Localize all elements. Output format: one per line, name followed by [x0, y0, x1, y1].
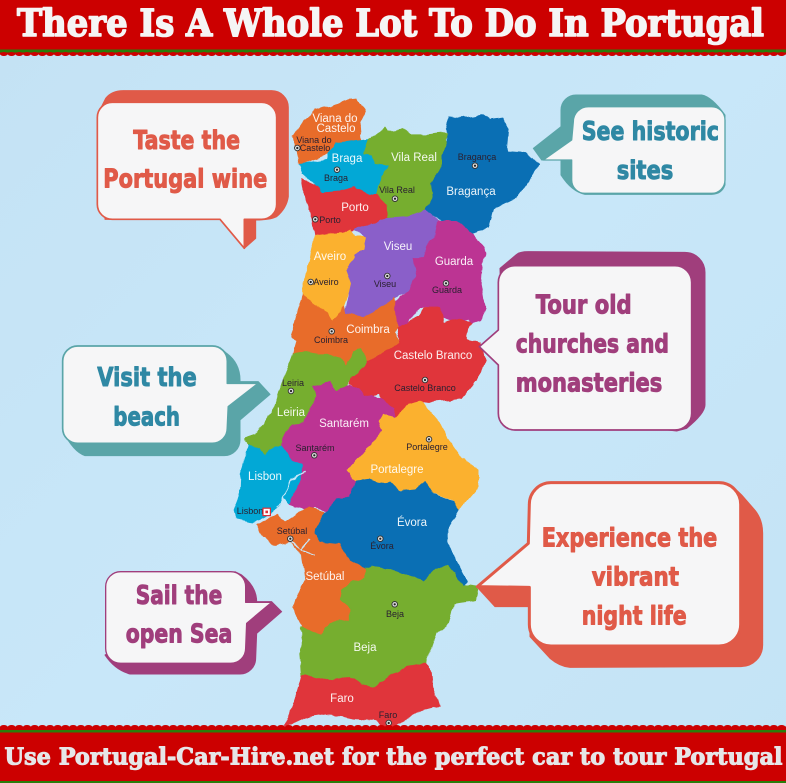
region labels: Coimbra — [314, 335, 348, 345]
region: Castelo Branco — [350, 308, 485, 418]
region: Vila Real — [364, 127, 448, 218]
footer banner — [0, 725, 786, 783]
callout: Experience the vibrant night life: vibrant — [592, 563, 679, 593]
callout: Experience the vibrant night life: Experience the — [542, 524, 717, 554]
region labels: Lisbon — [248, 471, 282, 483]
region labels: Castelo — [300, 143, 330, 153]
region labels: Guarda — [435, 256, 474, 268]
region: Viana do Castelo — [293, 99, 365, 164]
Sado estuary — [290, 538, 315, 555]
region labels: Vila Real — [391, 152, 437, 164]
region labels: Santarém — [319, 418, 369, 430]
region labels: Aveiro — [314, 251, 346, 263]
region labels: Castelo Branco — [394, 350, 472, 362]
region labels: Viseu — [384, 241, 412, 253]
callout: Tour old churches and monasteries — [479, 252, 705, 431]
region: Faro — [285, 663, 438, 730]
callout: Taste the Portugal wine — [97, 91, 288, 248]
Tagus estuary — [277, 472, 306, 507]
region labels: Porto — [319, 215, 341, 225]
region labels: Guarda — [432, 285, 462, 295]
header banner — [0, 0, 786, 56]
callout: Experience the vibrant night life: night life — [582, 601, 687, 631]
region labels: Aveiro — [313, 277, 339, 287]
city marker centres — [289, 147, 476, 724]
region labels: Braga — [324, 173, 348, 183]
region labels: Bragança — [446, 186, 496, 198]
region labels: Braga — [332, 153, 363, 165]
region labels: Faro — [330, 693, 354, 705]
callout: Sail the open Sea — [105, 572, 282, 674]
region labels: Leiria — [282, 378, 304, 388]
region labels: Santarém — [295, 443, 335, 453]
region: Santarém — [282, 382, 395, 512]
region labels: Castelo — [316, 123, 356, 135]
region labels: Portalegre — [370, 464, 424, 476]
region labels: Viana do — [296, 135, 332, 145]
region: Lisbon — [234, 446, 302, 522]
region labels: Beja — [386, 609, 404, 619]
callout: See historic sites — [533, 95, 725, 194]
callout: Sail the open Sea: Sail the — [136, 581, 222, 611]
region labels: Viana do — [312, 113, 358, 125]
region labels: Portalegre — [406, 442, 448, 452]
region labels: Coimbra — [346, 324, 390, 336]
callout: See historic sites: See historic — [582, 117, 719, 147]
callout: Tour old churches and monasteries: churches and — [516, 329, 669, 359]
region labels: Setúbal — [277, 526, 307, 536]
capital marker: Lisbon — [263, 508, 270, 516]
region labels: Leiria — [277, 407, 306, 419]
region: Aveiro — [303, 230, 367, 322]
region: Braga — [300, 139, 390, 196]
callout: Visit the beach: beach — [113, 403, 180, 433]
region labels: Lisbon — [237, 506, 263, 516]
region: Guarda — [393, 222, 486, 327]
region labels: Viseu — [374, 279, 396, 289]
city markers — [288, 145, 478, 726]
region labels — [237, 113, 496, 720]
callout: Experience the vibrant night life — [477, 482, 763, 667]
callout: Visit the beach — [63, 346, 270, 456]
region: Portalegre — [347, 402, 478, 510]
region: Porto — [302, 179, 387, 236]
region labels: Castelo Branco — [394, 383, 456, 393]
region: Setúbal — [257, 507, 365, 635]
region: Viseu — [345, 211, 438, 317]
region labels: Faro — [379, 710, 397, 720]
region: Leiria — [245, 348, 367, 456]
region labels: Évora — [397, 516, 428, 529]
callout: Sail the open Sea: open Sea — [126, 620, 232, 650]
callout: Tour old churches and monasteries: monasteries — [516, 369, 662, 399]
region labels: Évora — [370, 541, 394, 551]
region labels: Setúbal — [305, 571, 345, 583]
callout: Visit the beach: Visit the — [97, 363, 197, 393]
callout: Taste the Portugal wine: Portugal wine — [103, 165, 267, 195]
region: Évora — [315, 480, 467, 585]
region labels: Beja — [353, 642, 377, 654]
callout: Tour old churches and monasteries: Tour old — [536, 290, 632, 320]
region labels: Vila Real — [379, 185, 415, 195]
region: Bragança — [426, 115, 538, 233]
region: Coimbra — [291, 296, 400, 367]
callout: Taste the Portugal wine: Taste the — [133, 126, 240, 156]
region labels: Porto — [341, 202, 369, 214]
map of Portugal — [234, 99, 538, 730]
callout: See historic sites: sites — [617, 156, 673, 186]
region: Beja — [300, 565, 477, 688]
region labels: Bragança — [458, 152, 496, 162]
